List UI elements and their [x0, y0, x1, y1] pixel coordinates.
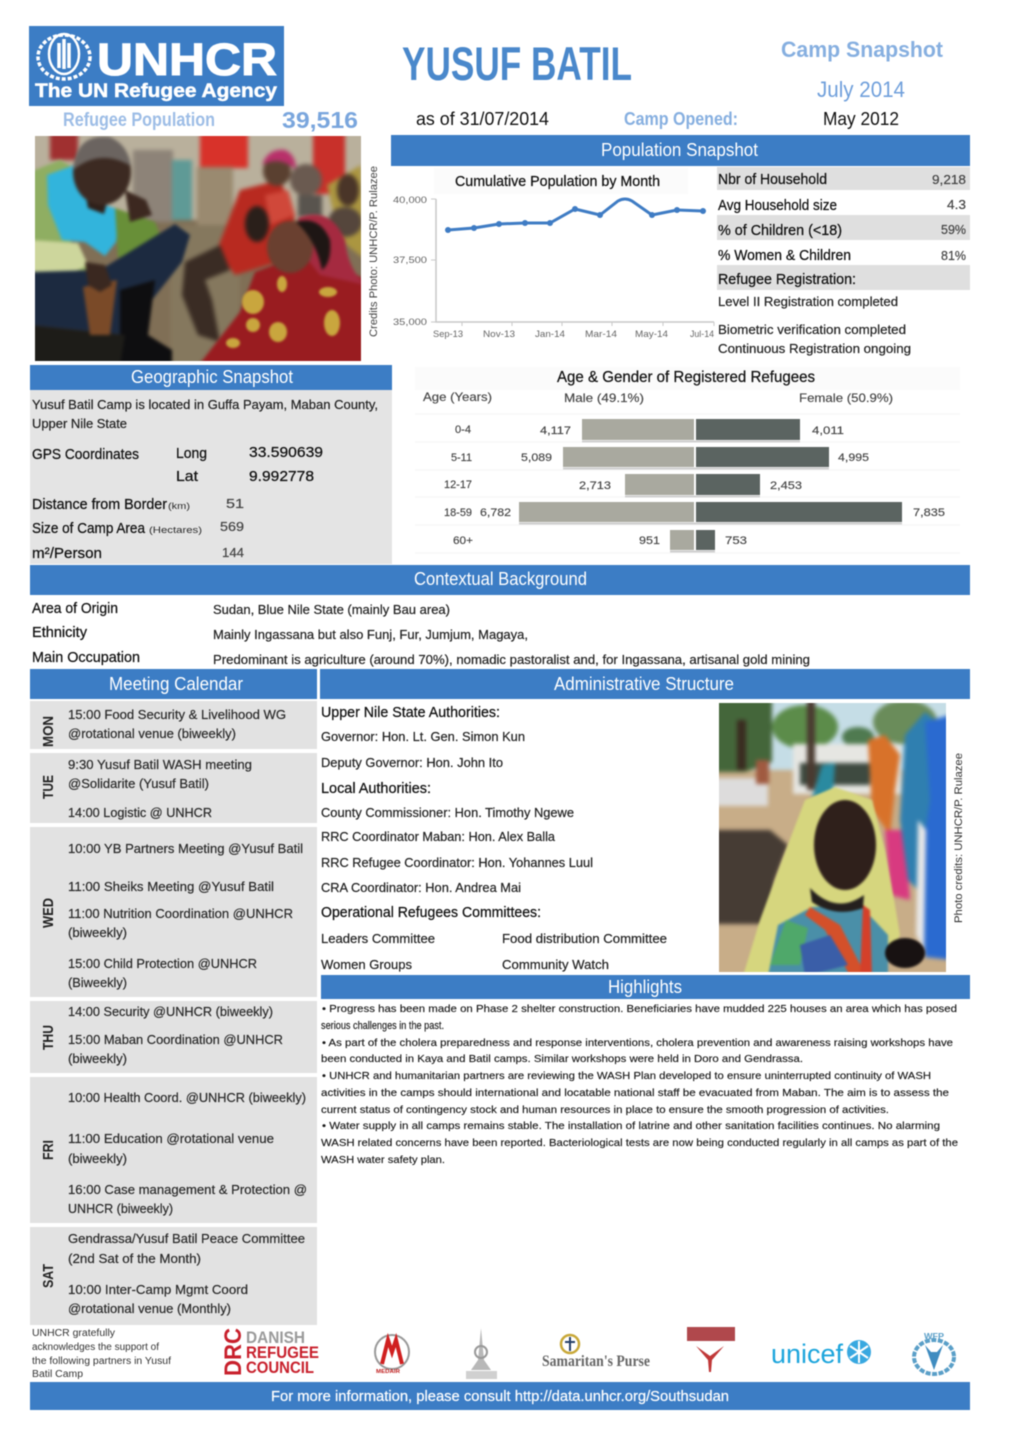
logo: Medair: MEDAIR	[376, 1369, 400, 1375]
calendar: Wednesday	[30, 827, 317, 997]
calendar: Thursday	[30, 1001, 317, 1073]
logo: Danish Refugee Council: REFUGEE	[246, 1343, 319, 1362]
calendar: Saturday: (2nd Sat of the Month)	[68, 1251, 201, 1266]
female values: 753	[725, 535, 747, 547]
female values: 7,835	[913, 507, 945, 519]
calendar: Saturday	[30, 1227, 317, 1325]
calendar: Saturday: SAT	[40, 1264, 57, 1288]
table: camp population figures	[717, 167, 970, 356]
panel: highlights: been conducted in Kaya and Batil camps. Similar workshops were held in Doro and Gendrassa.	[321, 1053, 803, 1065]
line chart: cumulative population by month: 40,000	[393, 195, 427, 206]
photo: child in yellow headscarf	[712, 698, 952, 976]
geographic snapshot header	[30, 365, 392, 390]
photo: aid worker talking with refugees	[30, 130, 366, 366]
calendar: Friday: UNHCR (biweekly)	[68, 1201, 173, 1216]
table: camp population figures: Level II Registration completed	[718, 295, 898, 309]
administrative structure header	[320, 669, 970, 699]
calendar: Tuesday: TUE	[40, 775, 57, 799]
calendar: Friday: (biweekly)	[68, 1151, 127, 1166]
calendar: Wednesday: (biweekly)	[68, 925, 127, 940]
footer bar	[30, 1382, 970, 1410]
calendar: Tuesday	[30, 753, 317, 823]
table: camp population figures: 9,218	[932, 172, 966, 187]
calendar: Friday: 11:00 Education @rotational venue	[68, 1131, 274, 1146]
calendar: Wednesday: 15:00 Child Protection @UNHCR	[68, 956, 257, 971]
geographic snapshot header: Geographic Snapshot	[131, 367, 293, 387]
meeting calendar header: Meeting Calendar	[109, 674, 243, 694]
logo: Danish Refugee Council	[220, 1328, 319, 1377]
panel: administrative structure: County Commissioner: Hon. Timothy Ngewe	[321, 806, 574, 820]
calendar: Monday	[30, 701, 317, 749]
panel: administrative structure: CRA Coordinator: Hon. Andrea Mai	[321, 881, 521, 895]
panel: administrative structure: Community Watch	[502, 958, 609, 972]
calendar: Thursday: 14:00 Security @UNHCR (biweekly)	[68, 1004, 273, 1019]
panel: highlights	[321, 975, 970, 1166]
age labels: 5-11	[451, 452, 472, 464]
calendar: Thursday: THU	[40, 1025, 57, 1050]
panel: administrative structure: Operational Refugees Committees:	[321, 904, 541, 921]
calendar: Friday: 10:00 Health Coord. @UNHCR (biweekly)	[68, 1090, 306, 1105]
panel: geographic snapshot: Distance from Border	[32, 496, 167, 513]
date heading: July 2014	[817, 77, 905, 102]
line chart: cumulative population by month	[393, 168, 714, 340]
table: camp population figures: 4.3	[947, 197, 966, 212]
female values: 4,995	[838, 452, 869, 464]
logo: church spire partner	[466, 1328, 497, 1379]
panel: population snapshot header	[391, 135, 970, 166]
contextual background header	[30, 565, 970, 595]
panel: administrative structure: Governor: Hon. Lt. Gen. Simon Kun	[321, 730, 525, 744]
table: camp population figures: % of Children (<18)	[718, 222, 842, 239]
refugee population number: 39,516	[282, 107, 358, 133]
age labels: 12-17	[444, 479, 472, 491]
panel: administrative structure: Deputy Governor: Hon. John Ito	[321, 756, 503, 770]
footer bar: For more information, please consult http://data.unhcr.org/Southsudan	[271, 1388, 729, 1405]
age labels: 60+	[453, 535, 473, 547]
line chart: cumulative population by month: Sep-13	[433, 329, 463, 340]
as of date: as of 31/07/2014	[416, 109, 549, 129]
refugee population label: Refugee Population	[63, 110, 215, 131]
male values	[480, 425, 660, 547]
line chart: cumulative population by month: 35,000	[393, 317, 427, 328]
partner acknowledgement text: acknowledges the support of	[32, 1342, 159, 1353]
panel: population snapshot header: Population Snapshot	[601, 140, 758, 160]
panel: highlights: WASH water safety plan.	[321, 1154, 445, 1166]
calendar: Thursday: (biweekly)	[68, 1051, 127, 1066]
panel: highlights: • As part of the cholera preparedness and response interventions, cholera prevention and awareness raising workshops have	[322, 1037, 953, 1049]
population pyramid: age and gender of registered refugees: Female (50.9%)	[799, 391, 893, 405]
calendar: Monday: MON	[40, 716, 57, 747]
table: camp population figures: Avg Household size	[718, 197, 837, 214]
male values: 5,089	[521, 452, 552, 464]
administrative structure header: Administrative Structure	[554, 674, 734, 694]
highlights header	[321, 975, 970, 999]
logo: Samaritan's Purse: Samaritan's Purse	[542, 1353, 650, 1370]
male bars	[519, 419, 694, 550]
calendar: Monday: 15:00 Food Security & Livelihood WG	[68, 707, 286, 722]
panel: contextual background: Ethnicity	[32, 624, 87, 641]
calendar: Tuesday: 9:30 Yusuf Batil WASH meeting	[68, 757, 252, 772]
panel: geographic snapshot: m²/Person	[32, 545, 102, 562]
calendar: Saturday: 10:00 Inter-Camp Mgmt Coord	[68, 1282, 248, 1297]
line chart: cumulative population by month: Cumulative Population by Month	[455, 173, 660, 190]
panel: administrative structure: Women Groups	[321, 958, 412, 972]
calendar: Wednesday: 11:00 Sheiks Meeting @Yusuf Batil	[68, 879, 274, 894]
panel: administrative structure: Upper Nile State Authorities:	[321, 704, 500, 721]
female bars	[696, 419, 902, 550]
partner acknowledgement text: UNHCR gratefully	[32, 1328, 115, 1339]
panel: administrative structure: RRC Refugee Coordinator: Hon. Yohannes Luul	[321, 856, 593, 870]
panel: administrative structure: RRC Coordinator Maban: Hon. Alex Balla	[321, 830, 555, 844]
calendar: Friday: FRI	[40, 1140, 57, 1160]
population pyramid: age and gender of registered refugees	[415, 367, 960, 553]
panel: highlights: • UNHCR and humanitarian partners are reviewing the WASH Plan developed to ensure uninterrupted continuity of WASH	[322, 1070, 931, 1082]
population pyramid: age and gender of registered refugees: Age (Years)	[423, 390, 492, 404]
UNHCR logo: UNHCR	[97, 34, 277, 85]
panel: contextual background	[30, 565, 970, 667]
female values: 2,453	[770, 480, 802, 492]
panel: meeting calendar	[30, 669, 317, 1325]
female values	[725, 425, 945, 547]
panel: geographic snapshot: GPS Coordinates	[32, 446, 139, 463]
UNHCR logo	[29, 26, 284, 106]
panel: highlights: activities in the camps should international and locatable national staff be evacuated from Maban. The aim is to assess the	[321, 1087, 949, 1099]
table: camp population figures: Continuous Registration ongoing	[718, 342, 911, 356]
panel: geographic snapshot: 144	[222, 545, 244, 560]
camp opened date: May 2012	[823, 109, 899, 129]
photo credit: Credits Photo: UNHCR/P. Rulazee	[368, 166, 380, 337]
panel: contextual background: Mainly Ingassana but also Funj, Fur, Jumjum, Magaya,	[213, 628, 528, 642]
logo: Danish Refugee Council: DANISH	[246, 1328, 305, 1347]
line chart: cumulative population by month: 37,500	[393, 255, 427, 266]
panel: highlights: current status of contingency stock and human resources in place to ensure the smooth progression of activities.	[321, 1104, 889, 1116]
calendar: Monday: @rotational venue (biweekly)	[68, 726, 236, 741]
contextual background header: Contextual Background	[414, 569, 587, 589]
line chart: cumulative population by month: May-14	[635, 329, 668, 340]
calendar: Saturday: Gendrassa/Yusuf Batil Peace Committee	[68, 1231, 305, 1246]
calendar: Tuesday: 14:00 Logistic @ UNHCR	[68, 805, 212, 820]
table: camp population figures: Nbr of Household	[718, 171, 827, 188]
panel: geographic snapshot: Yusuf Batil Camp is located in Guffa Payam, Maban County,	[32, 398, 378, 412]
age labels	[444, 424, 473, 547]
panel: highlights: • Water supply in all camps remains stable. The installation of latrine and other sanitation facilities continues. No alarming	[322, 1120, 940, 1132]
panel: geographic snapshot: Long	[176, 445, 207, 462]
panel: geographic snapshot: 9.992778	[249, 468, 314, 485]
panel: contextual background: Predominant is agriculture (around 70%), nomadic pastoralist and, for Ingassana, artisanal gold mining	[213, 653, 810, 667]
female values: 4,011	[812, 425, 844, 437]
male values: 2,713	[579, 480, 611, 492]
logo: unicef: unicef	[771, 1339, 843, 1369]
photo credit: Photo credits: UNHCR/P. Rulazee	[953, 753, 965, 923]
table: camp population figures: % Women & Children	[718, 247, 851, 264]
panel: geographic snapshot: (km)	[168, 501, 190, 511]
panel: administrative structure: Leaders Committee	[321, 932, 435, 946]
table: camp population figures: 59%	[941, 222, 966, 237]
calendar: Wednesday: 10:00 YB Partners Meeting @Yusuf Batil	[68, 841, 303, 856]
calendar: Wednesday: WED	[40, 898, 57, 928]
calendar: Friday: 16:00 Case management & Protection @	[68, 1182, 307, 1197]
panel: contextual background: Area of Origin	[32, 600, 118, 617]
highlights header: Highlights	[608, 977, 682, 997]
panel: geographic snapshot: Upper Nile State	[32, 417, 127, 431]
camp opened label: Camp Opened:	[624, 109, 738, 129]
male values: 6,782	[480, 507, 511, 519]
panel: geographic snapshot: 569	[220, 519, 244, 534]
partner acknowledgement text	[32, 1328, 171, 1380]
table: camp population figures: 81%	[941, 248, 966, 263]
logo: Samaritan's Purse	[542, 1335, 650, 1370]
panel: geographic snapshot: 33.590639	[249, 444, 323, 461]
panel: geographic snapshot: (Hectares)	[149, 525, 202, 535]
calendar: Friday	[30, 1077, 317, 1223]
meeting calendar header	[30, 669, 317, 699]
calendar: Thursday: 15:00 Maban Coordination @UNHCR	[68, 1032, 283, 1047]
logo: WFP	[914, 1332, 954, 1374]
panel: highlights: serious challenges in the past.	[321, 1020, 444, 1032]
panel: geographic snapshot: Size of Camp Area	[32, 520, 146, 537]
logo: WFP: WFP	[924, 1332, 945, 1341]
panel: contextual background: Main Occupation	[32, 649, 140, 666]
age labels: 0-4	[455, 424, 471, 436]
panel: contextual background: Sudan, Blue Nile State (mainly Bau area)	[213, 603, 450, 617]
line chart: cumulative population by month: Nov-13	[483, 329, 515, 340]
panel: highlights: • Progress has been made on Phase 2 shelter construction. Beneficiaries have mudded 225 houses an area which has posed	[322, 1003, 957, 1015]
male values: 4,117	[540, 425, 571, 437]
panel: geographic snapshot: 51	[226, 496, 244, 511]
calendar: Tuesday: @Solidarite (Yusuf Batil)	[68, 776, 209, 791]
camp snapshot heading: Camp Snapshot	[781, 37, 944, 62]
line chart: cumulative population by month: Jan-14	[535, 329, 565, 340]
panel: geographic snapshot: Lat	[176, 468, 199, 485]
panel: administrative structure	[320, 669, 970, 972]
logo: Danish Refugee Council: DRC	[220, 1328, 247, 1376]
partner acknowledgement text: the following partners in Yusuf	[32, 1356, 171, 1367]
table: camp population figures: Biometric verification completed	[718, 323, 906, 337]
male values: 951	[639, 535, 660, 547]
calendar: Wednesday: 11:00 Nutrition Coordination @UNHCR	[68, 906, 293, 921]
population pyramid: age and gender of registered refugees: Age & Gender of Registered Refugees	[557, 369, 815, 386]
calendar: Saturday: @rotational venue (Monthly)	[68, 1301, 231, 1316]
partner acknowledgement text: Batil Camp	[32, 1369, 83, 1380]
panel: administrative structure: Food distribution Committee	[502, 932, 667, 946]
panel: geographic snapshot	[30, 365, 392, 564]
age labels: 18-59	[444, 507, 472, 519]
UNHCR logo: The UN Refugee Agency	[35, 81, 277, 102]
logo: Veterinaires	[687, 1327, 735, 1372]
title: YUSUF BATIL	[402, 37, 632, 90]
line chart: cumulative population by month: Jul-14	[690, 329, 714, 340]
panel: administrative structure: Local Authorities:	[321, 780, 431, 797]
population pyramid: age and gender of registered refugees: Male (49.1%)	[564, 391, 644, 405]
logo: Danish Refugee Council: COUNCIL	[246, 1358, 314, 1377]
icon: UNHCR emblem	[38, 34, 90, 79]
panel: highlights: WASH related concerns have been reported. Bacteriological tests are now being conducted regularly in all camps as part of the	[321, 1137, 958, 1149]
logo: Medair	[375, 1335, 409, 1375]
table: camp population figures: Refugee Registration:	[718, 271, 856, 288]
calendar: Wednesday: (Biweekly)	[68, 975, 127, 990]
line chart: cumulative population by month: Mar-14	[585, 329, 617, 340]
